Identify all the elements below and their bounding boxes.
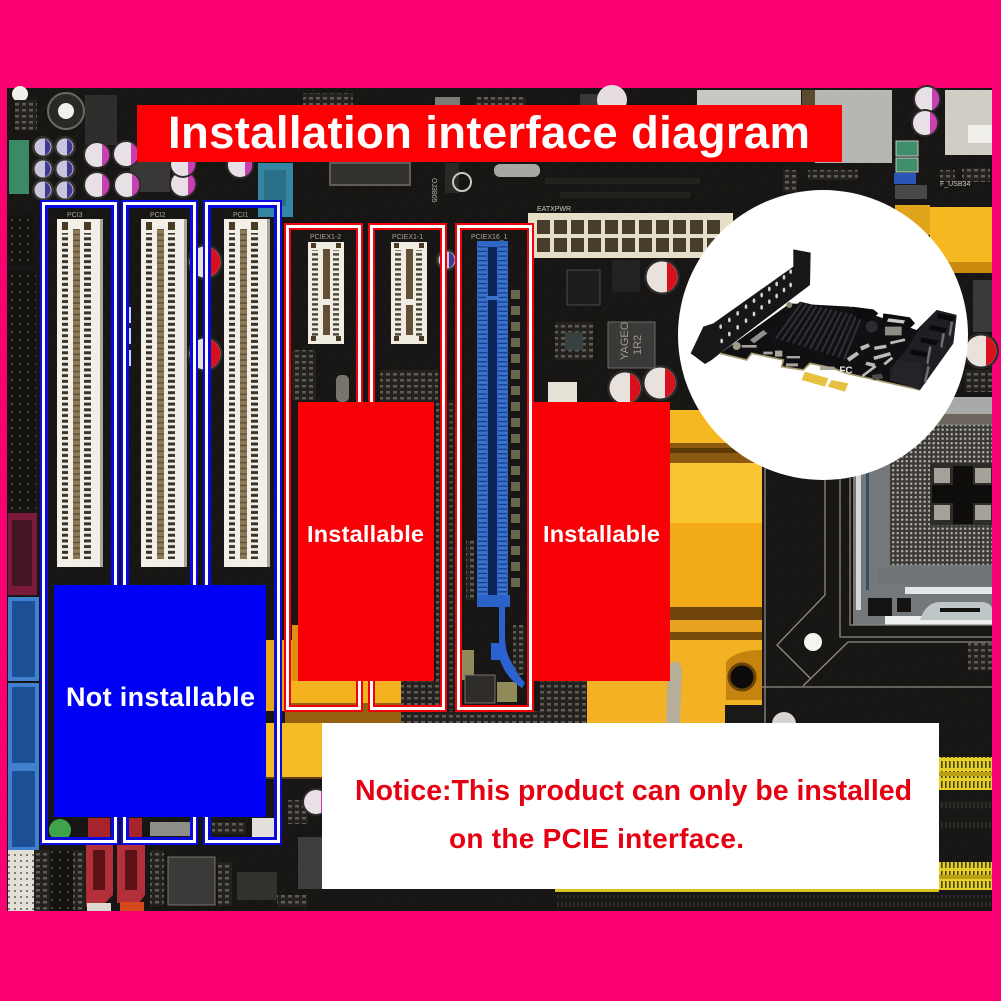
- PCIe x1 slots (white, two): PCIEX1-2: [310, 234, 341, 241]
- memory slots right: [939, 757, 992, 890]
- PCI slots (white, three): PCI2: [150, 212, 166, 219]
- PCI slots (white, three): PCI1: [233, 212, 249, 219]
- gold heatsink centre: [587, 410, 762, 723]
- heatsink: [772, 302, 863, 360]
- label: Installable (right): Installable: [543, 521, 660, 547]
- label: Installable (right): [533, 402, 670, 681]
- frame: PCIe x1-1: [369, 224, 446, 711]
- top centre chips: OJ3805: [430, 178, 437, 203]
- label: Not installable: [54, 585, 266, 817]
- label: Installable (left): [298, 402, 434, 681]
- CPU socket: [853, 397, 992, 625]
- PCB: [720, 302, 957, 390]
- gold fingers: [802, 372, 848, 392]
- bottom left components: [8, 788, 330, 911]
- SATA ports: [890, 310, 957, 390]
- blue frames marking PCI slots: [41, 201, 281, 844]
- green header: [9, 140, 29, 194]
- capacitors and chips beside the x16 slot: 1R2: [632, 335, 644, 355]
- PCI slots (white, three): PCI3: [67, 212, 83, 219]
- large purple capacitors: [83, 140, 254, 199]
- on-board connectors: [852, 307, 915, 335]
- top centre chips: [85, 85, 700, 203]
- label: Not installable: Not installable: [66, 682, 255, 712]
- frame: PCI 1: [204, 201, 281, 844]
- top left mount hole and header: [12, 86, 84, 130]
- PCIe x1 slots (white, two): [308, 234, 427, 344]
- PCIe x16 slot (blue): PCIEX16_1: [471, 234, 508, 241]
- frame: PCI 2: [122, 201, 197, 844]
- notice box: on the PCIE interface.: [449, 823, 744, 854]
- gold heatsink top right: [895, 205, 992, 273]
- dark red header: [8, 513, 37, 595]
- frame: PCIe x16: [456, 224, 533, 711]
- frame: PCI 3: [41, 201, 118, 844]
- bracket: [691, 249, 811, 364]
- frame: PCIe x1-2: [285, 224, 362, 711]
- PCB circuitry: FC: [839, 365, 853, 376]
- gold heatsink lower left: [266, 625, 402, 779]
- silver components top right: [697, 85, 992, 199]
- PCB circuitry: [839, 338, 905, 380]
- ATX power connector: [528, 206, 733, 258]
- ATX power connector: EATXPWR: [537, 206, 571, 213]
- PCIe x1 slots (white, two): PCIEX1-1: [392, 234, 423, 241]
- red capacitors behind PCI frames: [126, 244, 223, 372]
- blue USB headers: [8, 597, 39, 851]
- icon: SATA expansion card: [691, 249, 957, 392]
- silver components top right: F_USB34: [940, 181, 970, 188]
- teal serial connector: [258, 163, 293, 217]
- components inside PCIe frames: [292, 249, 587, 723]
- notice box: Notice:This product can only be installed: [355, 775, 912, 807]
- small capacitor above notice: [772, 712, 796, 736]
- capacitors and chips beside the x16 slot: [548, 259, 680, 406]
- capacitors and chips beside the x16 slot: YAGEO: [619, 321, 631, 360]
- CPU area board outline: [762, 405, 992, 723]
- right edge parts above socket: [963, 280, 999, 670]
- product photo circle: [678, 190, 968, 480]
- PCI slots (white, three): [57, 212, 270, 567]
- red frames marking PCIe slots: [285, 224, 533, 711]
- notice box: [322, 723, 939, 889]
- small purple capacitors: [32, 136, 76, 201]
- mounting hole: [804, 633, 822, 651]
- label: Installable (left): Installable: [307, 521, 424, 547]
- PCIe x16 slot (blue): [471, 234, 525, 688]
- title banner: Installation interface diagram: [168, 107, 810, 158]
- memory slots bottom: [555, 889, 992, 907]
- left pin headers: [9, 215, 36, 510]
